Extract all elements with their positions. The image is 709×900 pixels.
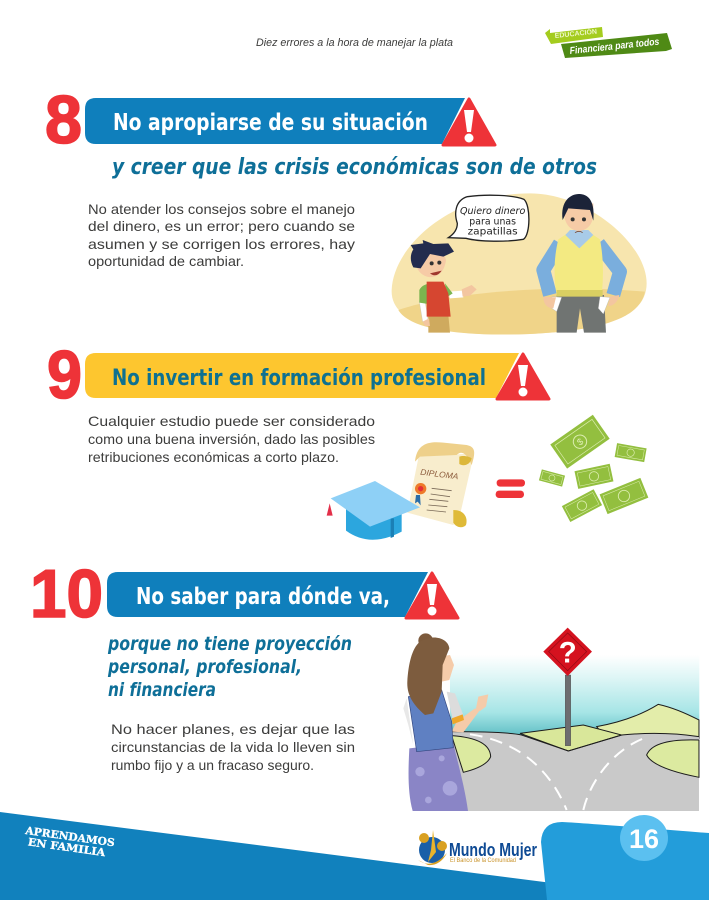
subtitle: personal, profesional,: [107, 656, 302, 678]
section 10: [30, 556, 699, 811]
boy: [411, 240, 477, 333]
logo globe: [418, 830, 447, 865]
footer label: Aprendamos en familia: [22, 825, 115, 860]
footer band: [0, 812, 709, 900]
body text: oportunidad de cambiar.: [88, 253, 244, 269]
page number badge: [620, 815, 668, 861]
badge: Educación Financiera para todos: EDUCACIÓN: [554, 27, 597, 40]
body text: circunstancias de la vida lo lleven sin: [111, 739, 355, 755]
body text: del dinero, es un error; pero cuando se: [88, 218, 355, 234]
footer label: Aprendamos en familia: APRENDAMOS: [24, 825, 115, 849]
badge: Educación Financiera para todos: Financiera para todos: [569, 37, 660, 57]
page header text: Diez errores a la hora de manejar la plata: [256, 37, 453, 49]
body text: retribuciones económicas a corto plazo.: [88, 449, 339, 465]
subtitle: y creer que las crisis económicas son de otros: [112, 155, 597, 180]
icon: warning triangle: [406, 573, 458, 618]
subtitle: ni financiera: [108, 679, 216, 701]
number 8: 8: [45, 82, 82, 158]
body text: [88, 201, 355, 269]
number 10: 10: [30, 556, 103, 632]
subtitle: porque no tiene proyección: [107, 633, 352, 655]
section 8: [45, 82, 647, 335]
diploma: [407, 442, 474, 527]
speech bubble: [448, 195, 529, 241]
body text: rumbo fijo y a un fracaso seguro.: [111, 757, 314, 773]
body text: asumen y se corrigen los errores, hay: [88, 236, 355, 252]
money bills: $: [575, 436, 586, 448]
body text: No hacer planes, es dejar que las: [111, 721, 355, 737]
number 9: 9: [47, 337, 82, 413]
question sign: [543, 628, 592, 746]
speech bubble: para unas: [469, 216, 516, 227]
banner: No invertir en formación profesional: [85, 353, 519, 398]
body text: Cualquier estudio puede ser considerado: [88, 413, 375, 429]
banner: No saber para dónde va: No saber para dónde va,: [136, 584, 390, 610]
question sign: ?: [559, 636, 577, 669]
illustration: woman at a crossroads with question sign: [403, 628, 699, 811]
speech bubble: Quiero dinero: [460, 206, 526, 217]
banner: No saber para dónde va: [107, 572, 428, 617]
icon: warning triangle: [497, 354, 549, 399]
body text: [88, 413, 375, 465]
subtitle: [107, 633, 352, 701]
speech bubble: zapatillas: [468, 227, 518, 238]
banner: No apropiarse de su situación: [85, 98, 465, 144]
body text: No atender los consejos sobre el manejo: [88, 201, 355, 217]
diploma: DIPLOMA: [420, 467, 459, 481]
hills and road: [450, 704, 699, 811]
money bills: [539, 415, 648, 522]
footer label: Aprendamos en familia: EN FAMILIA: [27, 836, 107, 859]
logo: Mundo Mujer: Mundo Mujer: [449, 840, 537, 860]
page number badge: 16: [629, 824, 659, 854]
body text: como una buena inversión, dado las posibles: [88, 431, 375, 447]
badge: Educación Financiera para todos: [545, 27, 672, 58]
footer page tab: [541, 822, 709, 900]
section 9: [47, 337, 648, 540]
logo: Mundo Mujer: El Banco de la Comunidad: [450, 858, 516, 864]
woman: [403, 633, 488, 811]
man: [543, 194, 620, 333]
icon: warning triangle: [443, 99, 495, 145]
equals sign: [496, 479, 525, 498]
logo: Mundo Mujer: [418, 830, 537, 865]
body text: [111, 721, 355, 773]
banner: No apropiarse de su situación: No apropiarse de su situación: [113, 110, 428, 136]
illustration: diploma and graduation cap equals money: [327, 415, 648, 540]
illustration: boy and man with empty pockets: [392, 193, 647, 335]
banner: No invertir en formación profesional: No invertir en formación profesional: [112, 366, 486, 391]
graduation cap: [327, 481, 420, 540]
